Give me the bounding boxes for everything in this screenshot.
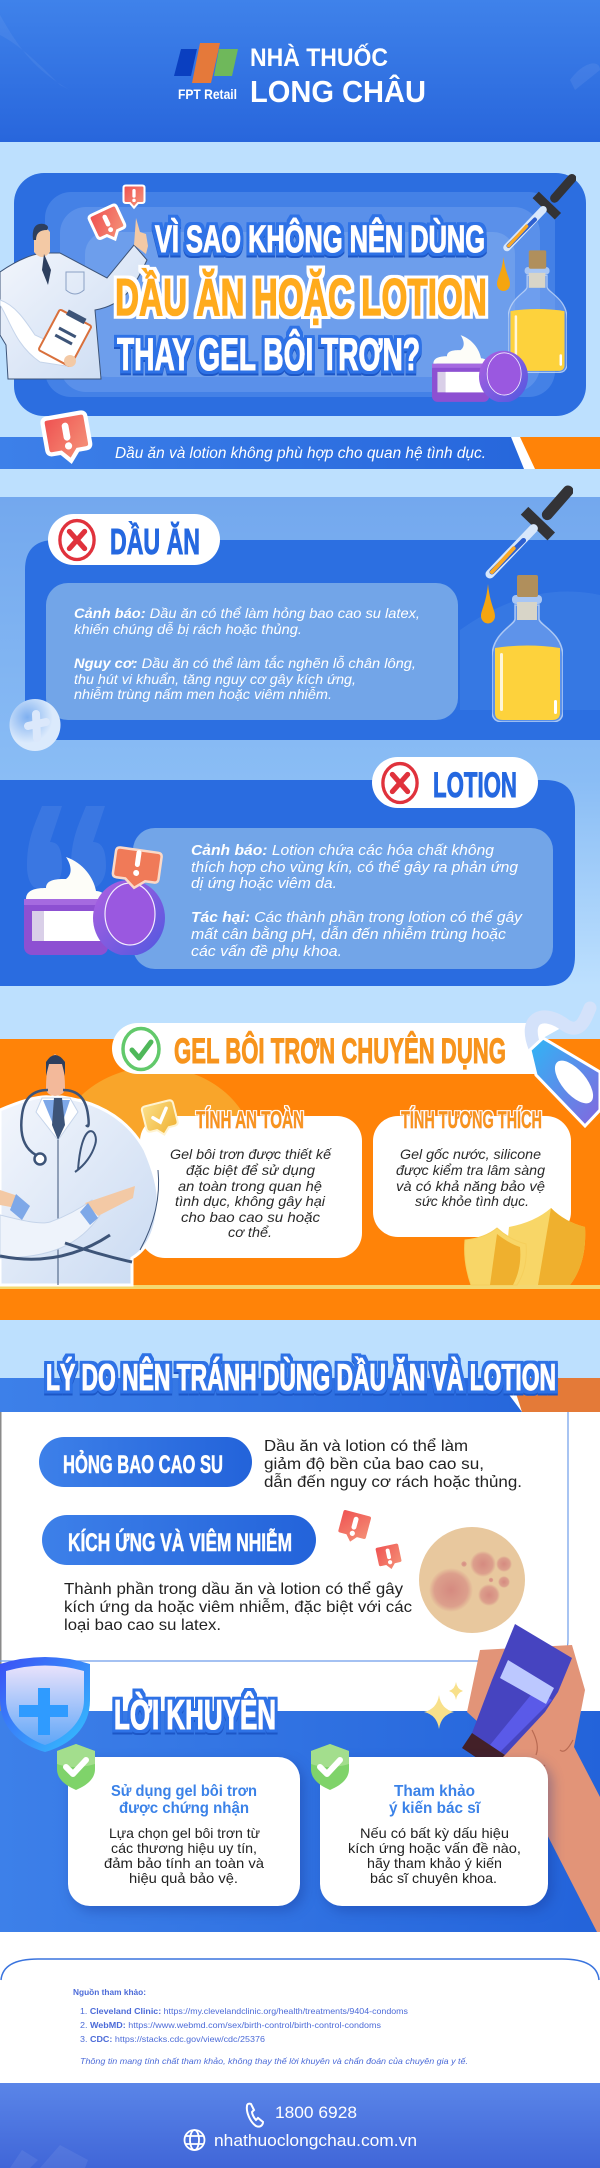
heading band (0, 1356, 600, 1412)
reference list: 3. CDC: https://stacks.cdc.gov/view/cdc/25376 (80, 2034, 265, 2044)
reference list: Thông tin mang tính chất tham khảo, không thay thế lời khuyên và chẩn đoán của chuyên gia y tế. (80, 2056, 468, 2066)
decorative quote mark (27, 806, 106, 890)
illustration: doctor with crossed arms (0, 1054, 159, 1285)
card body: bác sĩ chuyên khoa. (370, 1870, 497, 1886)
card body: hiệu quả bảo vệ. (129, 1870, 238, 1886)
heading pill: dầu ăn (48, 514, 220, 565)
phone number: 1800 6928 (275, 2103, 357, 2122)
logo: FPT Retail (174, 43, 238, 102)
card heading: safety: TÍNH AN TOÀN (196, 1106, 304, 1134)
icon: green shield 2 (311, 1744, 349, 1790)
card title: được chứng nhận (119, 1800, 249, 1817)
header band (0, 0, 600, 142)
icon: big alert (42, 412, 93, 465)
section background: oil and lotion (0, 497, 600, 986)
card body: Lựa chọn gel bôi trơn từ (109, 1825, 260, 1841)
illustration: bottle and dropper (481, 491, 568, 722)
heading pill: dầu ăn: DẦU ĂN (110, 521, 200, 562)
card body (348, 1825, 521, 1886)
card title: Tham khảo (394, 1783, 475, 1800)
card body: safety: đặc biệt để sử dụng (186, 1162, 315, 1178)
card body: safety: tình dục, không gây hại (175, 1193, 326, 1209)
icon: sparkles (424, 1682, 463, 1729)
card: lotion warning text: Tác hại: Các thành phần trong lotion có thể gây (191, 910, 523, 926)
reason: condom damage: HỎNG BAO CAO SU (63, 1449, 223, 1479)
card: lotion warning text: các vấn đề phụ khoa. (191, 944, 342, 960)
icon: globe (184, 2130, 204, 2150)
reason: irritation and inflammation: kích ứng da hoặc viêm nhiễm, đặc biệt với các (64, 1597, 412, 1616)
icon: phone (247, 2104, 263, 2127)
card body: compatibility: sức khỏe tình dục. (415, 1193, 529, 1209)
panel: title hero (0, 173, 586, 416)
logo wordmark (250, 42, 426, 109)
card: compatibility (373, 1106, 571, 1237)
logo wordmark: LONG CHÂU (250, 73, 426, 109)
illustration: hand holding tube (462, 1624, 600, 1932)
illustration: irritated skin (419, 1527, 525, 1633)
title text: THAY GEL BÔI TRƠN? (117, 329, 420, 380)
icon: medical shield (0, 1657, 90, 1752)
card title (111, 1783, 257, 1817)
logo: FPT Retail: FPT Retail (178, 86, 237, 102)
heading pill: lotion: LOTION (433, 766, 517, 805)
illustration: lotion jar (24, 857, 165, 956)
reference list (73, 1987, 468, 2066)
illustration: squeezed gel tube (530, 1008, 600, 1126)
icon: alert on jar (111, 847, 162, 891)
card body: compatibility: Gel gốc nước, silicone (400, 1146, 541, 1162)
logo wordmark: NHÀ THUỐC (250, 42, 388, 72)
card: lotion warning text: thích hợp cho vùng kín, có thể gây ra phản ứng (191, 860, 518, 876)
panel: lotion (0, 757, 575, 986)
card body: safety: cơ thể. (228, 1224, 272, 1240)
title text (115, 216, 487, 380)
reason: irritation and inflammation (42, 1515, 412, 1634)
card body: safety (170, 1146, 332, 1240)
subtitle text: Dầu ăn và lotion không phù hợp cho quan hệ tình dục. (115, 445, 486, 462)
footer (0, 2083, 600, 2168)
reason: irritation and inflammation: Thành phần trong dầu ăn và lotion có thể gây (64, 1580, 403, 1598)
reason: irritation and inflammation: loại bao cao su latex. (64, 1617, 221, 1634)
card body: compatibility: được kiểm tra lâm sàng (396, 1162, 545, 1178)
illustration: lotion jar (432, 335, 528, 403)
card body: safety: Gel bôi trơn được thiết kế (170, 1146, 332, 1162)
card body: kích ứng hoặc vấn đề nào, (348, 1840, 521, 1856)
card: oil warning text: Cảnh báo: Dầu ăn có thể làm hỏng bao cao su latex, (74, 605, 420, 621)
illustration: pointing doctor (0, 218, 148, 379)
illustration: gold shields (465, 1208, 585, 1285)
card title: Sử dụng gel bôi trơn (111, 1783, 257, 1800)
card: oil warning text (46, 583, 458, 720)
card: safety (140, 1106, 362, 1258)
reason: irritation and inflammation: KÍCH ỨNG VÀ VIÊM NHIỄM (68, 1527, 292, 1557)
card body: hãy tham khảo ý kiến (367, 1855, 502, 1871)
reference list: 1. Cleveland Clinic: https://my.clevelandclinic.org/health/treatments/9404-condoms (80, 2006, 408, 2016)
section: advice (0, 1624, 600, 1932)
icon: green shield 1 (57, 1744, 95, 1790)
section: reasons (0, 1356, 600, 1932)
icons: alerts (334, 1508, 404, 1574)
reason: condom damage: giảm độ bền của bao cao su, (264, 1456, 484, 1473)
card body (104, 1825, 264, 1886)
card body: đảm bảo tính an toàn và (104, 1855, 264, 1871)
card title (389, 1783, 481, 1817)
alert icons (88, 186, 144, 245)
card body: safety: cho bao cao su hoặc (181, 1209, 320, 1225)
card: consult doctor (320, 1757, 548, 1906)
icon: plus bubble (10, 699, 60, 751)
card: oil warning text: khiến chúng dễ bị rách hoặc thủng. (74, 621, 302, 637)
panel: specialized lubricant gel (0, 1008, 600, 1320)
card body: compatibility: và có khả năng bảo vệ (396, 1178, 545, 1194)
heading pill: lotion (372, 757, 538, 808)
reason: condom damage: dẫn đến nguy cơ rách hoặc thủng. (264, 1472, 522, 1491)
reference list: 2. WebMD: https://www.webmd.com/sex/birth-control/birth-control-condoms (80, 2020, 381, 2030)
panel: cooking oil (10, 491, 600, 751)
card: lotion warning text (133, 828, 553, 969)
card: oil warning text: thu hút vi khuẩn, tăng nguy cơ gây kích ứng, (74, 671, 356, 687)
card body: compatibility (396, 1146, 545, 1209)
card title: ý kiến bác sĩ (389, 1800, 481, 1817)
heading pill: gel (112, 1023, 600, 1074)
heading: advice: LỜI KHUYÊN (114, 1690, 276, 1738)
reason: condom damage: Dầu ăn và lotion có thể làm (264, 1437, 468, 1455)
website: nhathuoclongchau.com.vn (214, 2131, 417, 2150)
reference list: Nguồn tham khảo: (73, 1987, 146, 1997)
reason: condom damage (39, 1437, 522, 1491)
card: lotion warning text: dị ứng hoặc viêm da. (191, 876, 337, 892)
panel: references (0, 1932, 600, 2083)
card body: các thương hiệu uy tín, (111, 1840, 257, 1856)
icon: gold check badge (141, 1100, 180, 1138)
banner: subtitle strip (0, 412, 600, 469)
illustration: oil bottle with dropper (497, 178, 572, 373)
card: lotion warning text: Cảnh báo: Lotion chứa các hóa chất không (191, 843, 494, 859)
card: oil warning text: nhiễm trùng nấm men hoặc viêm nhiễm. (74, 686, 332, 702)
card: oil warning text: Nguy cơ: Dầu ăn có thể làm tắc nghẽn lỗ chân lông, (74, 655, 416, 671)
card body: safety: an toàn trong quan hệ (178, 1178, 322, 1194)
card: certified gel (68, 1757, 300, 1906)
card body: Nếu có bất kỳ dấu hiệu (360, 1825, 509, 1841)
card: lotion warning text: mất cân bằng pH, dẫn đến nhiễm trùng hoặc (191, 926, 507, 943)
